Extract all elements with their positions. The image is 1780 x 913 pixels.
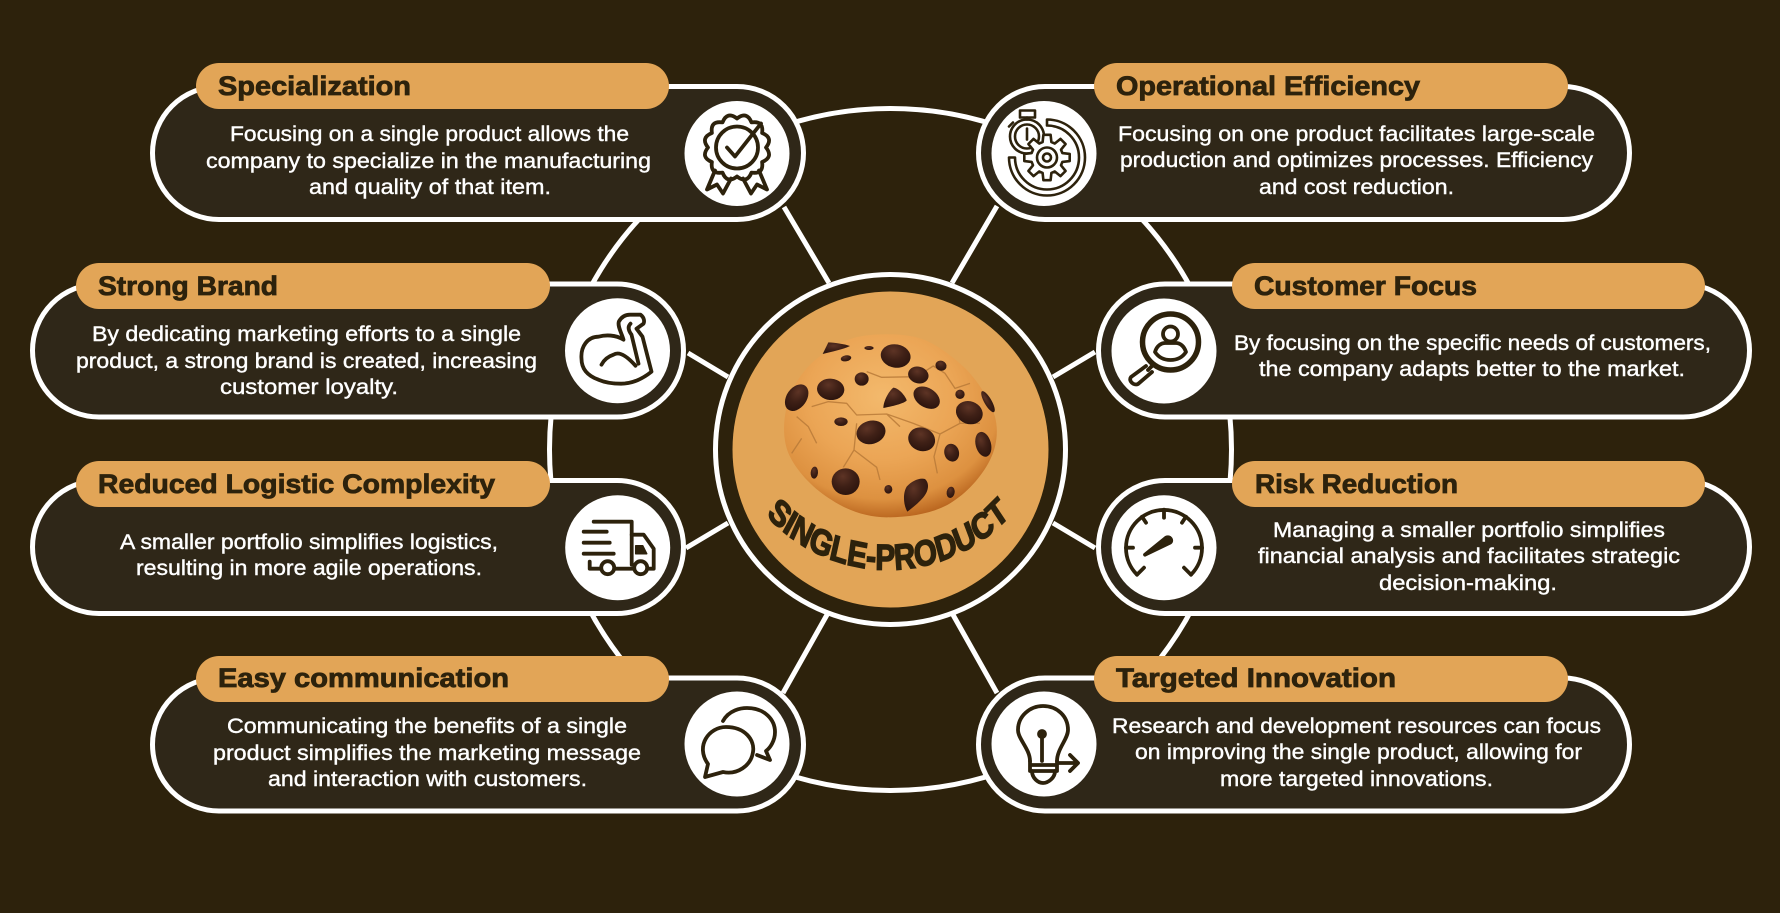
body text: Managing a smaller portfolio simplifies [1273,519,1665,542]
heading pill [196,656,669,702]
body text [206,123,651,199]
body text: By dedicating marketing efforts to a single [92,323,521,346]
heading pill [76,461,550,507]
body text: By focusing on the specific needs of customers, [1234,332,1711,355]
capsule [978,678,1630,811]
body text [76,323,537,399]
hub disc [732,292,1048,608]
capsule [978,86,1630,220]
body text: customer loyalty. [220,376,398,399]
body text: company to specialize in the manufacturing [206,150,651,173]
body text [1234,332,1711,381]
body text: financial analysis and facilitates strategic [1258,545,1680,568]
heading: Risk Reduction [1255,469,1458,499]
heading: Targeted Innovation [1116,663,1396,693]
heading pill [1232,263,1705,309]
capsule [152,86,804,220]
body text [1112,715,1601,791]
body text: A smaller portfolio simplifies logistics, [120,531,498,554]
heading: Operational Efficiency [1116,71,1420,101]
icon: flexed arm [565,298,670,403]
hub title curved text: SINGLE-PRODUCT [768,495,1006,570]
icon: stopwatch and gear [992,101,1096,206]
panel: reduced logistic complexity [32,461,684,614]
body text [213,715,641,791]
body text: more targeted innovations. [1220,768,1493,791]
icon: light bulb with arrow [992,692,1096,796]
heading: Customer Focus [1254,271,1477,301]
capsule [1098,284,1750,417]
panel: customer focus [1098,263,1750,417]
body text: Focusing on one product facilitates large-scale [1118,123,1595,146]
cookie image [780,334,997,517]
heading: Easy communication [218,663,509,693]
heading pill [76,263,550,309]
body text: product, a strong brand is created, increasing [76,350,537,373]
heading: Strong Brand [98,271,278,301]
center hub [713,272,1068,627]
body text: Communicating the benefits of a single [227,715,627,738]
heading pill [1094,63,1568,109]
body text: Research and development resources can focus [1112,715,1601,738]
icon: quality badge [684,101,790,206]
icon: delivery truck [565,495,670,600]
heading pill [1094,656,1568,702]
body text: production and optimizes processes. Efficiency [1120,149,1594,172]
body text: and interaction with customers. [268,768,587,791]
panel: specialization [152,63,804,220]
panel: targeted innovation [978,656,1630,811]
icon: magnifier with person [1112,298,1216,404]
heading: Reduced Logistic Complexity [98,469,495,499]
panel: easy communication [152,656,804,811]
heading pill [1232,461,1705,507]
icon: speedometer gauge [1112,495,1216,600]
body text: Focusing on a single product allows the [230,123,629,146]
capsule [32,480,684,614]
body text: decision-making. [1379,572,1557,595]
capsule [152,678,804,811]
heading: Specialization [218,71,411,101]
body text: resulting in more agile operations. [136,557,482,580]
body text: on improving the single product, allowing for [1135,741,1582,764]
body text: and cost reduction. [1259,176,1454,199]
panel: operational efficiency [978,63,1630,220]
panel: strong brand [32,263,684,417]
hub ring [716,274,1066,624]
capsule [1098,480,1750,614]
heading pill [196,63,669,109]
connector lines [550,108,1232,790]
capsule [32,284,684,417]
body text: and quality of that item. [309,176,551,199]
icon: chat bubbles [684,692,790,796]
body text: product simplifies the marketing message [213,742,641,765]
body text [120,531,498,580]
body text [1118,123,1595,199]
panel: risk reduction [1098,461,1750,614]
body text: the company adapts better to the market. [1259,358,1685,381]
body text [1258,519,1680,595]
